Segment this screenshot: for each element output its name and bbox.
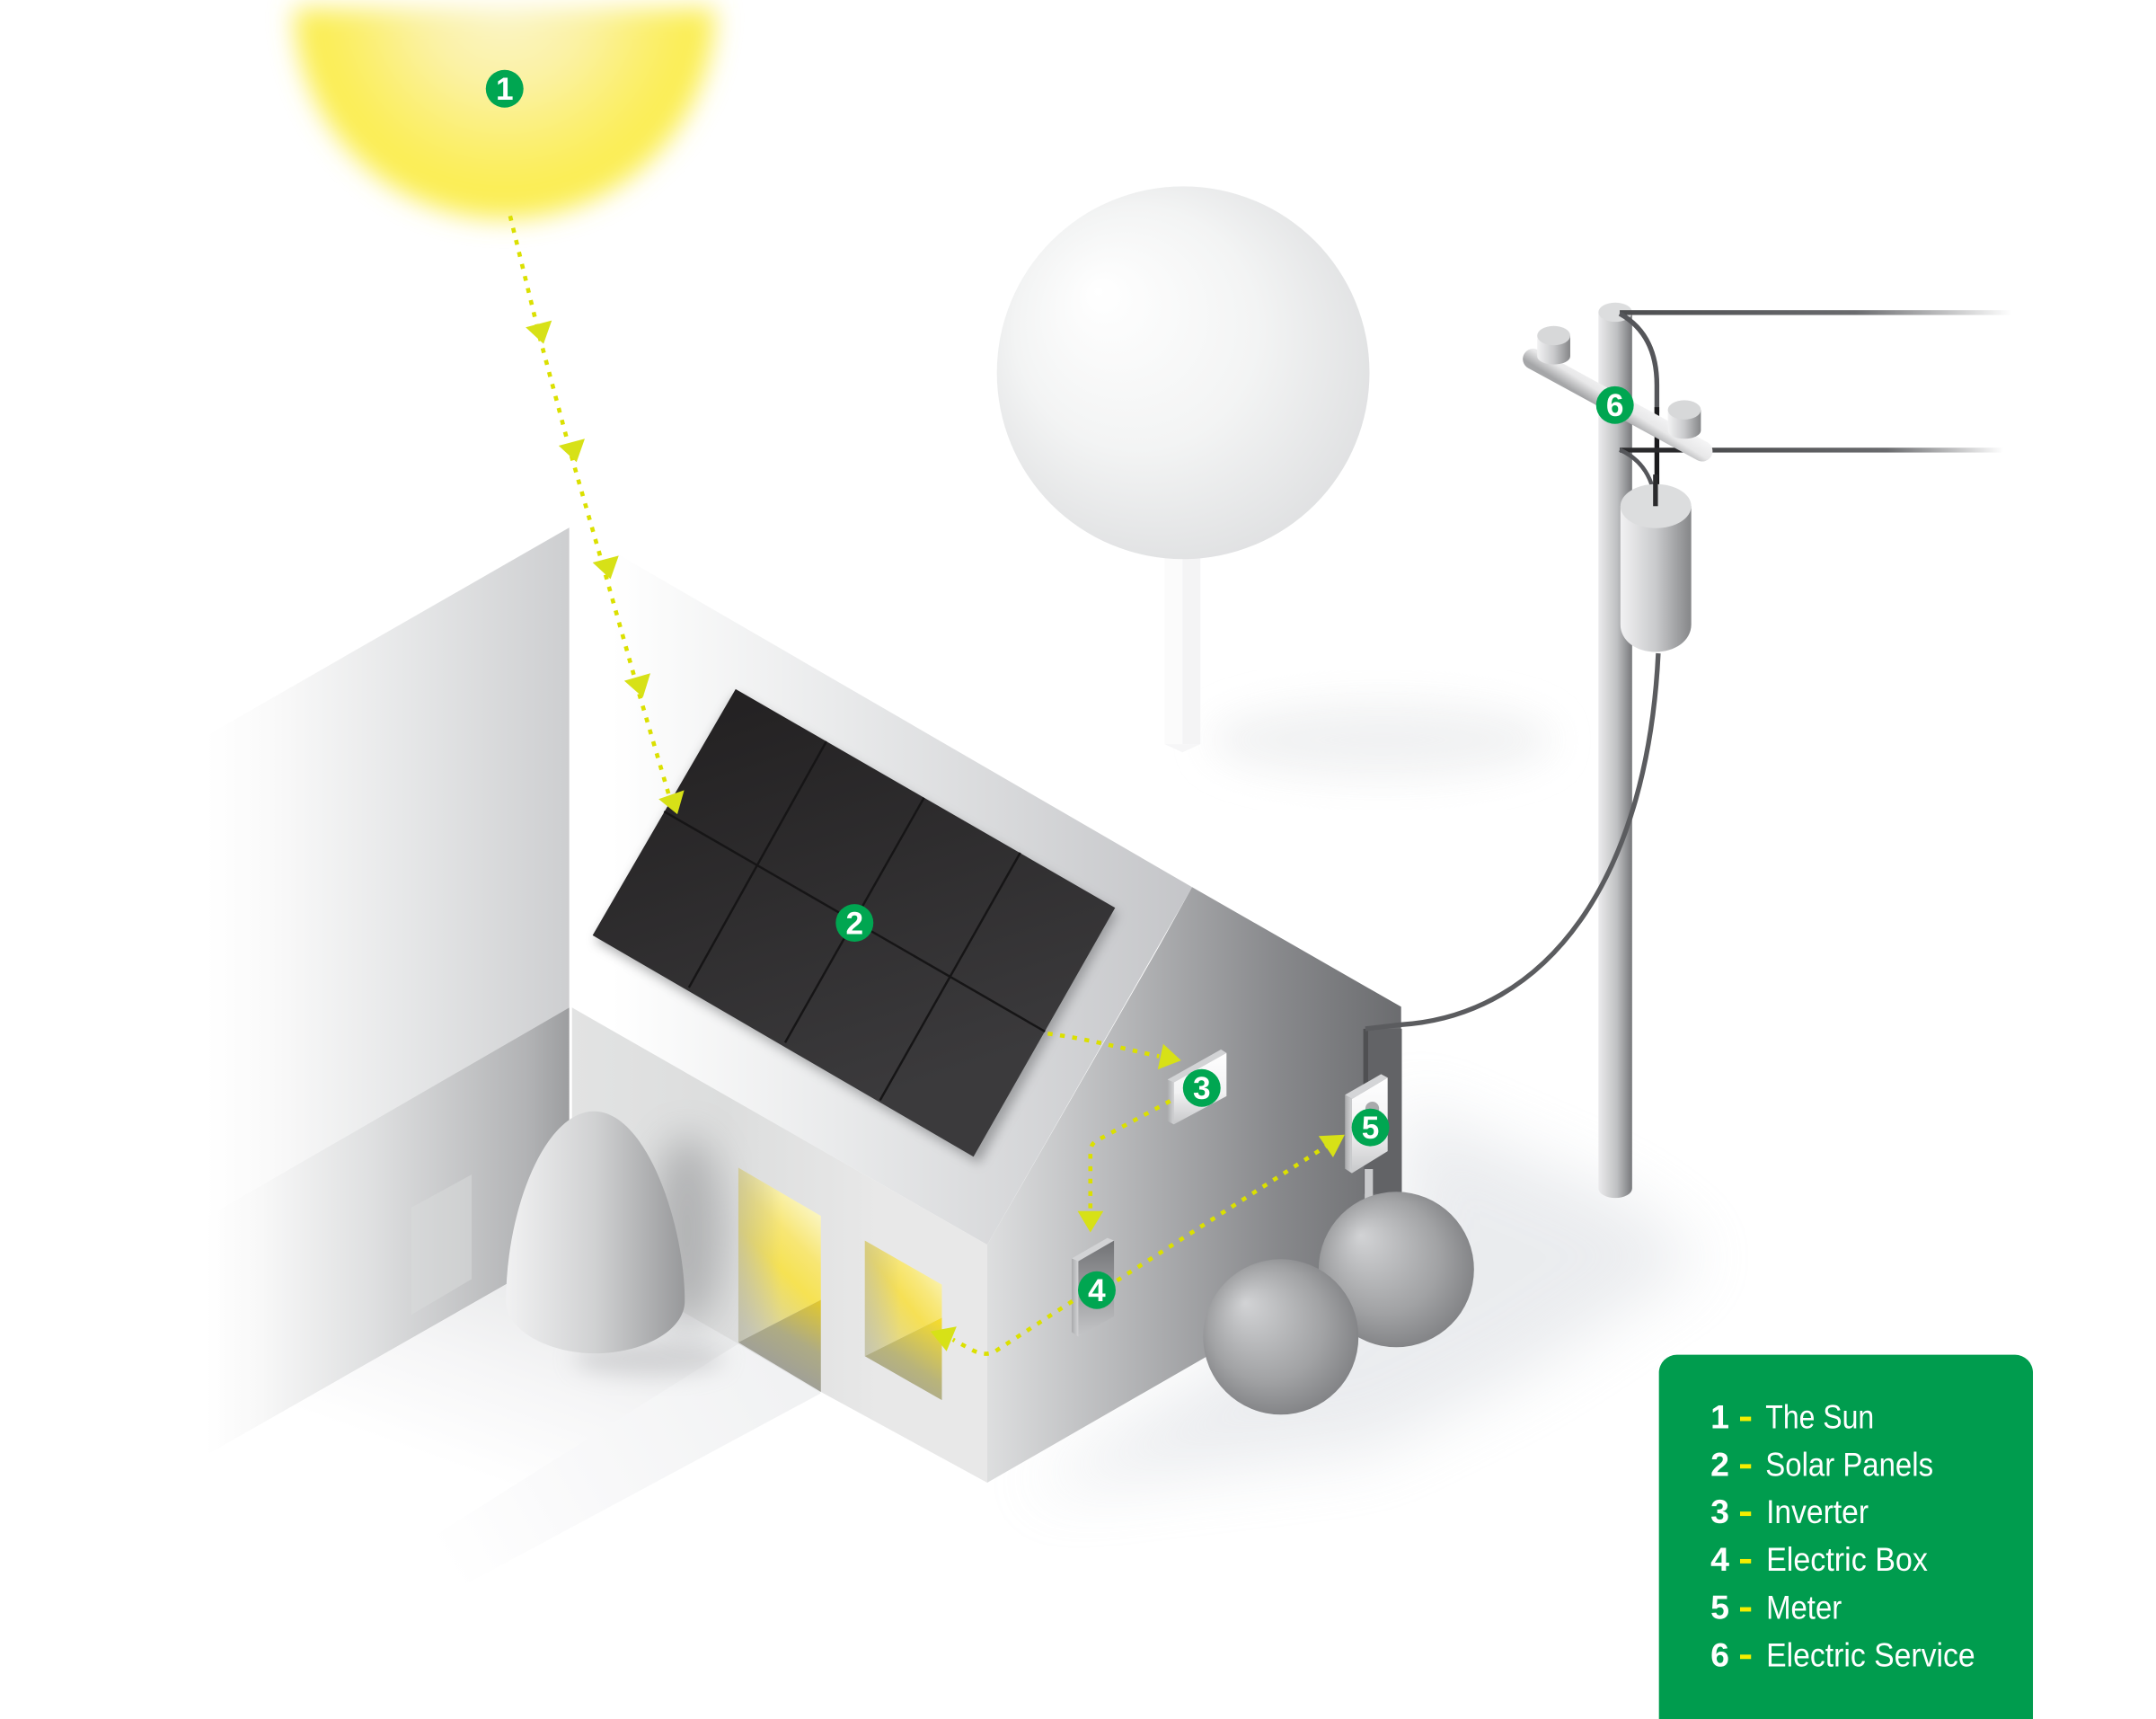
legend row 5: 5: [1710, 1589, 1729, 1626]
conduit on wall: [1364, 1029, 1401, 1194]
arrow: inverter to electric box: [1078, 1101, 1171, 1232]
walkway: [381, 1343, 821, 1590]
bush ground shadow: [573, 1342, 725, 1376]
legend row 6: Electric Service: [1766, 1635, 1975, 1673]
wires: [1620, 310, 2011, 506]
legend row 4: 4: [1710, 1540, 1729, 1578]
service cable: [1365, 653, 1658, 1029]
inverter box: [1167, 1050, 1226, 1124]
legend row 1: 1: [1710, 1398, 1729, 1436]
meter post: [1365, 1169, 1373, 1202]
bush: [506, 1112, 685, 1353]
badge 4: 4: [1088, 1273, 1106, 1308]
insulators: [1537, 326, 1701, 439]
legend row 6: 6: [1710, 1635, 1729, 1673]
legend row 2: 2: [1710, 1445, 1729, 1483]
arrow: electric box to window: [931, 1301, 1073, 1354]
badge 5: 5: [1362, 1111, 1379, 1146]
legend row 3: 3: [1710, 1493, 1729, 1530]
badge 5: [1352, 1109, 1390, 1147]
badge 3: [1183, 1069, 1221, 1107]
ground shadow of house: [1024, 1101, 1705, 1493]
arrow: panels to inverter: [1047, 1033, 1181, 1069]
badge 2: 2: [845, 906, 863, 941]
legend row 2: [1710, 1445, 1933, 1483]
legend row 1: [1710, 1398, 1874, 1436]
legend row 5: [1710, 1589, 1842, 1626]
window: [865, 1241, 941, 1400]
legend row 2: Solar Panels: [1765, 1445, 1933, 1483]
sun: [295, 8, 715, 218]
legend row 3: Inverter: [1766, 1493, 1869, 1530]
badge 2: [835, 904, 873, 942]
legend row 4: Electric Box: [1766, 1540, 1928, 1578]
door: [738, 1168, 821, 1392]
badge 1: 1: [496, 72, 514, 107]
arrow: sun to panels: [510, 216, 685, 814]
left vertical corner edge: [570, 527, 572, 1247]
legend row 3: [1710, 1493, 1869, 1530]
meter: [1345, 1074, 1388, 1174]
electric box: [1072, 1238, 1114, 1336]
left neighbouring wall: [207, 527, 821, 1596]
crossarm: [1533, 359, 1702, 451]
transformer: [1621, 474, 1692, 652]
badge 6: [1596, 386, 1634, 424]
house: [570, 527, 1401, 1483]
arrow: electric box to meter: [1117, 1135, 1345, 1280]
badge 4: [1078, 1272, 1116, 1309]
legend row 4: [1710, 1540, 1928, 1578]
bush shadow: [652, 1135, 723, 1327]
legend row 1: The Sun: [1765, 1398, 1874, 1436]
badge 3: 3: [1193, 1071, 1211, 1106]
spheres: [1203, 1192, 1474, 1414]
solar panels: [593, 689, 1115, 1156]
badge 1: [486, 70, 524, 108]
roof: [570, 527, 1192, 1245]
legend panel: [1659, 1355, 2033, 1719]
utility pole: [1598, 303, 1632, 1198]
legend row 5: Meter: [1766, 1589, 1842, 1626]
badge 6: 6: [1606, 388, 1623, 423]
tree: [997, 186, 1369, 752]
side gable wall: [987, 887, 1401, 1483]
ground shadow of tree: [1210, 702, 1554, 778]
front wall: [570, 1006, 987, 1483]
panel shadow: [596, 695, 1118, 1164]
